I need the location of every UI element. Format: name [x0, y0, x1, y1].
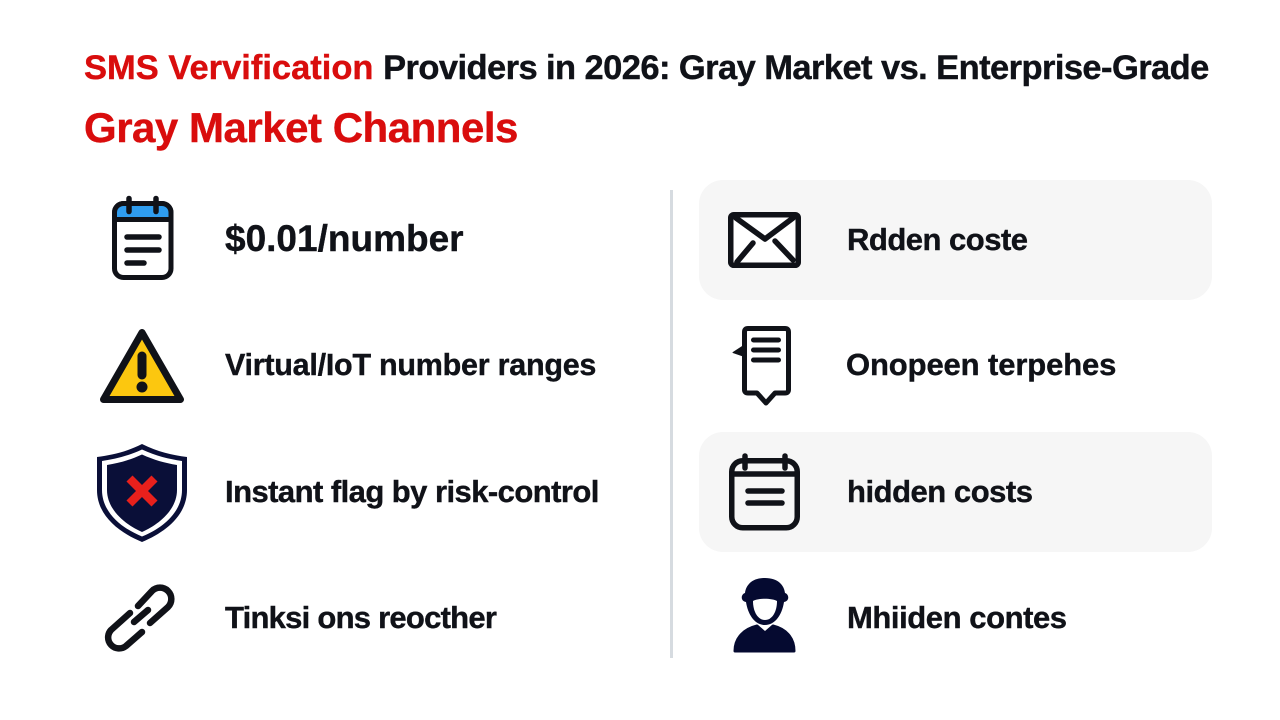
icon: calendar note	[112, 196, 174, 280]
text: virtual number ranges: Virtual/IoT number ranges	[225, 348, 596, 382]
text: instant flag: Instant flag by risk-control	[225, 474, 599, 509]
icon: person	[734, 578, 796, 652]
icon: calendar	[729, 453, 800, 530]
icon: warning triangle	[100, 329, 184, 403]
panel: lower card	[699, 432, 1212, 552]
text: open terms: Onopeen terpehes	[846, 347, 1116, 382]
text: links: Tinksi ons reocther	[225, 600, 496, 635]
icon: envelope	[728, 212, 801, 268]
icon: document bubble	[732, 326, 791, 406]
icon: shield with cross	[97, 444, 187, 542]
heading: gray market channels: Gray Market Channels	[84, 104, 518, 151]
text: price: $0.01/number	[225, 218, 464, 259]
icon: chain link	[104, 584, 175, 652]
text: hidden costs 2: hidden costs	[847, 474, 1033, 509]
text: hidden contents: Mhiiden contes	[847, 600, 1067, 635]
panel: top card	[699, 180, 1212, 300]
title: SMS Vervification Providers in 2026: Gray Market vs. Enterprise-Grade	[84, 49, 1209, 87]
text: hidden costs 1: Rdden coste	[847, 222, 1028, 257]
